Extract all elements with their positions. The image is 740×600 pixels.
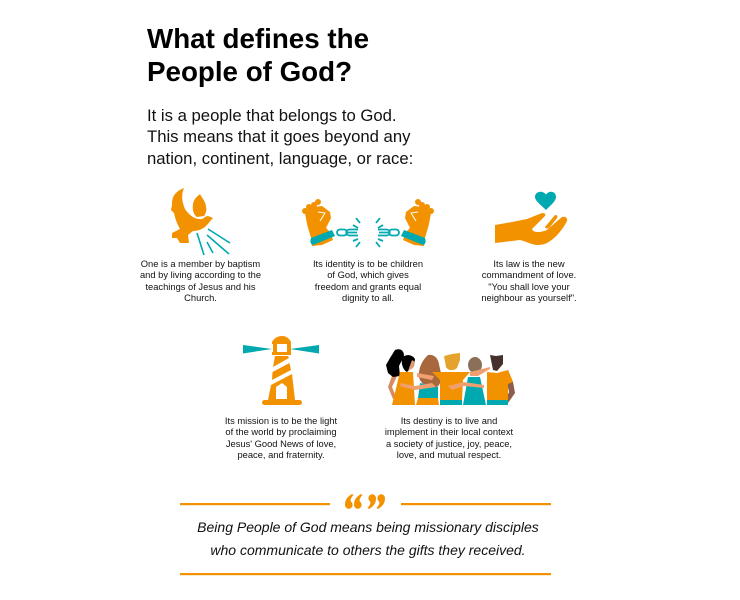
icon: lighthouse xyxy=(243,336,319,405)
caption: destiny xyxy=(385,416,514,460)
arms behind xyxy=(388,373,397,399)
quote text: who communicate to others the gifts they received. xyxy=(210,542,526,558)
icon: broken chains and fists xyxy=(302,199,434,247)
icon: dove xyxy=(171,188,230,255)
caption: mission: Its mission is to be the light xyxy=(225,416,337,426)
caption: law xyxy=(481,258,577,303)
caption: destiny: Its destiny is to live and xyxy=(401,416,497,426)
caption: baptism: Church. xyxy=(184,293,217,303)
woman 2 xyxy=(419,355,441,388)
quote divider lines xyxy=(180,503,551,575)
intro text: This means that it goes beyond any xyxy=(147,127,410,146)
caption: baptism: One is a member by baptism xyxy=(141,258,260,268)
title: People of God? xyxy=(147,56,352,87)
woman 1 xyxy=(386,349,404,377)
right fist xyxy=(376,199,434,247)
caption: mission: peace, and fraternity. xyxy=(237,450,325,460)
caption: mission: Jesus' Good News of love, xyxy=(226,438,336,448)
intro text xyxy=(147,106,413,168)
caption: identity: Its identity is to be children xyxy=(313,258,423,268)
caption: law: "You shall love your xyxy=(488,282,570,292)
caption: identity xyxy=(313,258,423,303)
caption: law: Its law is the new xyxy=(493,258,565,268)
left fist xyxy=(302,199,360,247)
caption: baptism xyxy=(140,258,261,303)
caption: destiny: love, and mutual respect. xyxy=(397,450,501,460)
icon: quotation marks xyxy=(345,494,385,509)
caption: baptism: and by living according to the xyxy=(140,270,261,280)
intro text: It is a people that belongs to God. xyxy=(147,106,397,124)
caption: law: commandment of love. xyxy=(482,270,576,280)
caption: identity: of God, which gives xyxy=(327,270,409,280)
caption: destiny: a society of justice, joy, peace, xyxy=(386,438,512,448)
caption: destiny: implement in their local context xyxy=(385,427,513,437)
caption: law: neighbour as yourself". xyxy=(481,293,577,303)
caption: identity: dignity to all. xyxy=(342,293,394,303)
quote text xyxy=(197,519,539,558)
icon: group of people xyxy=(386,349,515,405)
caption: baptism: teachings of Jesus and his xyxy=(145,282,256,292)
caption: mission xyxy=(225,416,338,460)
icon: hand with heart xyxy=(495,192,567,245)
quote text: Being People of God means being missionary disciples xyxy=(197,519,539,535)
intro text: nation, continent, language, or race: xyxy=(147,148,413,168)
caption: identity: freedom and grants equal xyxy=(315,282,421,292)
woman 4 xyxy=(468,357,482,373)
caption: mission: of the world by proclaiming xyxy=(225,427,337,437)
arms in front xyxy=(400,383,436,390)
man 3 xyxy=(444,353,460,370)
man 5 xyxy=(490,355,503,371)
title: What defines the xyxy=(147,23,369,54)
title xyxy=(147,23,369,87)
